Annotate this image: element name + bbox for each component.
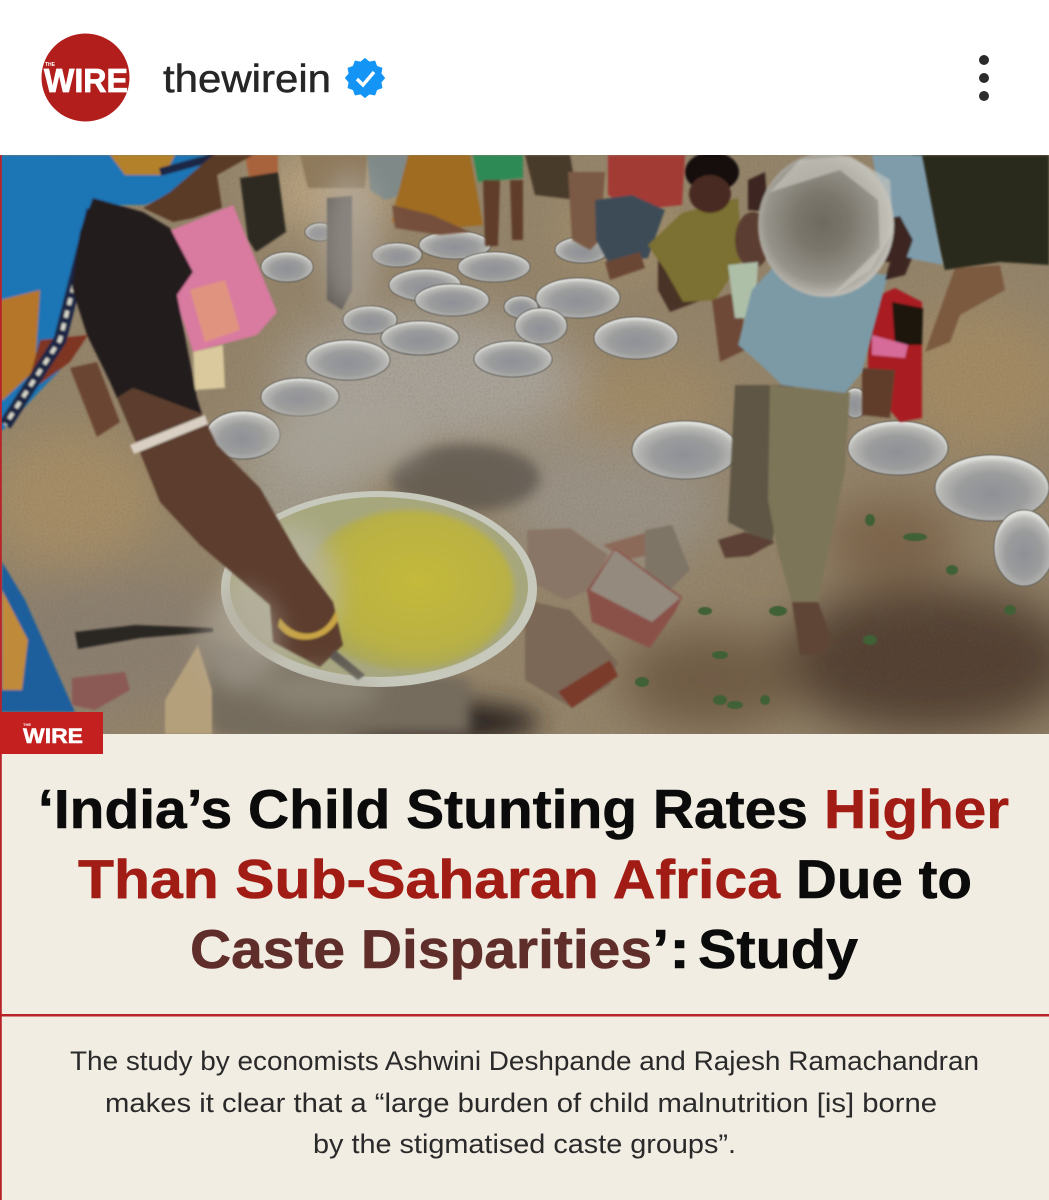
summary text: makes it clear that a “large burden of child malnutrition [is] borne — [105, 1088, 937, 1118]
header: account bar — [42, 34, 989, 122]
headline: ‘India’s Child Stunting Rates — [38, 778, 808, 840]
headline — [38, 778, 1009, 980]
bangles — [130, 415, 208, 454]
back arm — [70, 362, 120, 437]
sari — [0, 155, 215, 430]
face — [143, 155, 253, 222]
brand tag: The Wire — [0, 712, 103, 754]
arm and hand — [117, 388, 343, 667]
leaves on the ground — [635, 514, 1016, 709]
child standing with plate — [718, 153, 943, 655]
shadow under pot — [213, 684, 552, 734]
brand tag: The Wire: THE — [23, 722, 31, 727]
photo: children waiting for a meal cooked over a fire — [0, 150, 1049, 744]
lower sari and foot — [0, 562, 130, 712]
child in orange skirt and dark pants — [240, 155, 286, 252]
icon: verified badge — [346, 58, 384, 98]
pink dress child — [167, 205, 277, 390]
logo: The Wire red circle — [42, 34, 130, 122]
woman stirring the pot — [0, 155, 365, 712]
logo: The Wire red circle: THE — [45, 62, 56, 68]
headline: ’: — [652, 918, 690, 980]
adult with dark skirt at right — [912, 155, 1049, 352]
steel plates on the ground — [206, 223, 1049, 586]
ground light and shadow patches — [0, 150, 1049, 735]
summary text: The study by economists Ashwini Deshpande and Rajesh Ramachandran — [70, 1046, 979, 1076]
summary text: by the stigmatised caste groups”. — [313, 1129, 736, 1159]
brand tag: The Wire: WIRE — [23, 725, 83, 748]
steam around the pot — [200, 590, 380, 712]
drifting smoke — [265, 170, 425, 480]
headline: Caste Disparities — [190, 918, 652, 980]
black sleeve — [72, 198, 202, 414]
child in red — [862, 288, 923, 422]
small girl — [712, 212, 771, 362]
headline: Than Sub-Saharan Africa — [78, 848, 780, 910]
icon: more menu dots — [979, 55, 989, 101]
divider rule — [0, 1014, 1049, 1016]
seated children at top — [240, 152, 1049, 422]
ash patch — [390, 444, 540, 512]
summary text — [70, 1046, 979, 1159]
cooking pot with yellow food — [207, 491, 537, 734]
bricks — [525, 525, 690, 708]
spoon — [330, 650, 365, 680]
logo: The Wire red circle: WIRE — [44, 62, 128, 99]
headline: Higher — [824, 778, 1009, 840]
tawa knife and sand patch — [75, 625, 213, 734]
soil grain — [4, 156, 1048, 562]
account name: thewirein — [163, 58, 331, 101]
headline: Study — [698, 918, 858, 980]
headline: Due to — [796, 848, 972, 910]
